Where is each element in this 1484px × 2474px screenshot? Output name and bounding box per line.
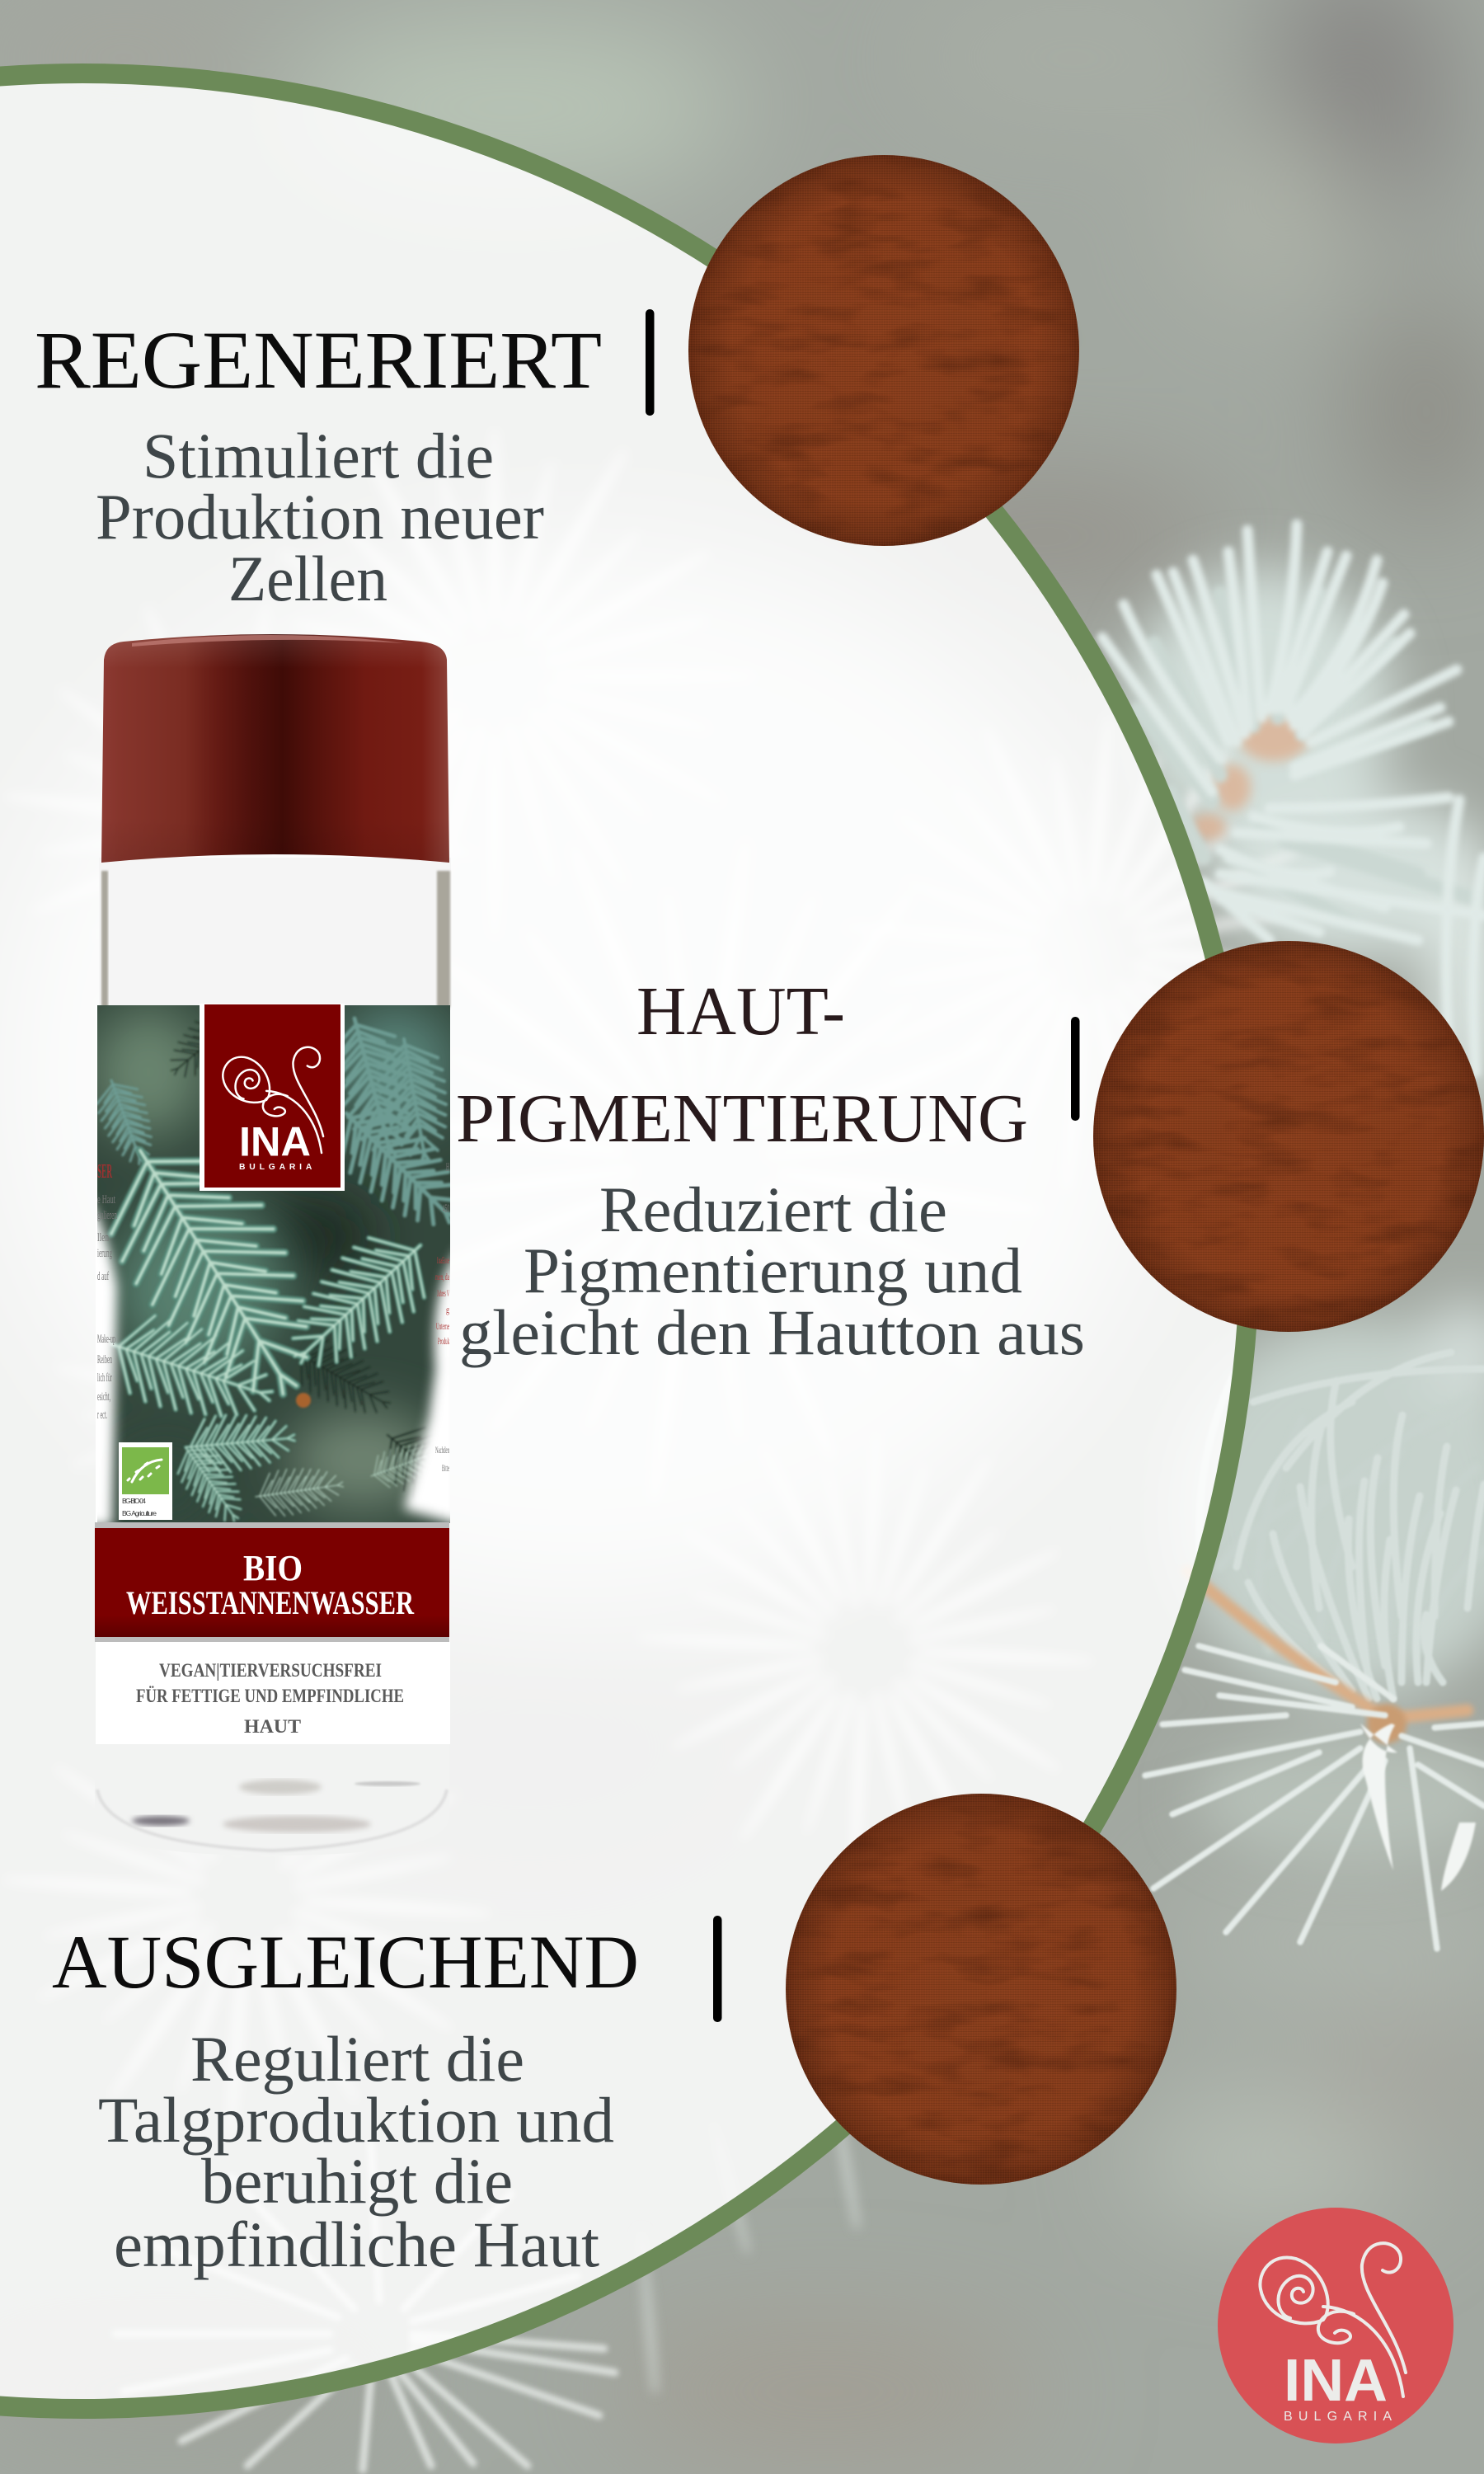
label red band with product name bbox=[95, 1522, 449, 1642]
fir branch: lower left bbox=[115, 2144, 615, 2470]
bottle base glass bbox=[95, 1740, 449, 1856]
small label side text bbox=[97, 1161, 449, 1474]
product bottle: Nachden bbox=[435, 1444, 449, 1456]
small label side text: Reiben bbox=[97, 1353, 112, 1366]
label fir photo bbox=[97, 1005, 450, 1523]
product bottle: men, da bbox=[435, 1271, 449, 1282]
product bottle: Produk bbox=[438, 1335, 449, 1347]
small label side text: gulieren bbox=[97, 1209, 117, 1222]
faint fir bursts behind the white disc bbox=[0, 428, 1352, 2158]
small label side text: Make-up bbox=[97, 1333, 115, 1346]
small label side text: r ect. bbox=[97, 1409, 107, 1422]
label red band with product name: BIO bbox=[243, 1548, 303, 1588]
fir branch: middle right bbox=[1145, 1352, 1484, 1949]
white vignette at label sides bbox=[82, 1192, 462, 1526]
panel: white disc with green ring bbox=[0, 73, 1250, 2409]
label claims: VEGAN|TIERVERSUCHSFREI bbox=[159, 1660, 382, 1681]
product bottle bbox=[77, 634, 503, 1856]
label logo square: BULGARIA bbox=[239, 1163, 312, 1172]
description: Stimuliert die bbox=[143, 420, 494, 492]
small label side text: ierung bbox=[97, 1247, 112, 1260]
divider bar bbox=[1071, 1017, 1080, 1121]
description bbox=[459, 1174, 1085, 1368]
product bottle: Unterne bbox=[436, 1320, 449, 1332]
bottle cap bbox=[101, 634, 449, 863]
product bottle: H bbox=[446, 1161, 449, 1174]
heading: haut-pigmentierung: PIGMENTIERUNG bbox=[456, 1080, 1028, 1157]
brown circle: pigmentierung bbox=[1093, 941, 1484, 1332]
brand logo: red circle bbox=[1218, 2208, 1453, 2443]
product bottle: InaEsse bbox=[437, 1254, 449, 1266]
fir branch: upper right bbox=[1102, 524, 1484, 1072]
heading: haut-pigmentierung: HAUT- bbox=[636, 973, 845, 1050]
label paper bbox=[96, 1005, 450, 1744]
heading: regeneriert: REGENERIERT bbox=[35, 314, 602, 406]
brown circle: regeneriert bbox=[688, 155, 1079, 546]
small label side text: esicht, bbox=[97, 1390, 110, 1404]
product bottle: Jahres V bbox=[437, 1287, 449, 1299]
small label side text: SER bbox=[97, 1161, 112, 1183]
description: beruhigt die bbox=[201, 2145, 513, 2217]
label claims: HAUT bbox=[244, 1716, 301, 1737]
organic leaf badge: BG-BIO-04 bbox=[122, 1497, 146, 1505]
bottle neck glass bbox=[99, 858, 451, 1010]
description: Reguliert die bbox=[190, 2023, 524, 2095]
divider bar bbox=[713, 1916, 722, 2022]
description bbox=[98, 2023, 614, 2280]
label red band with product name: WEISSTANNENWASSER bbox=[126, 1584, 415, 1621]
small label side text: llen bbox=[97, 1231, 109, 1244]
small label side text: d auf bbox=[97, 1270, 109, 1283]
brown circle: ausgleichend bbox=[786, 1794, 1176, 2185]
block: haut-pigmentierung bbox=[456, 973, 1085, 1368]
organic leaf badge bbox=[119, 1442, 172, 1520]
block: regeneriert bbox=[35, 309, 655, 614]
description: gleicht den Hautton aus bbox=[459, 1296, 1085, 1368]
label logo square: INA bbox=[239, 1119, 311, 1165]
small label side text: e Haut bbox=[97, 1193, 115, 1206]
description bbox=[96, 420, 544, 614]
description: Talgproduktion und bbox=[98, 2084, 614, 2156]
organic leaf badge: BG Agriculture bbox=[122, 1509, 157, 1517]
divider bar bbox=[646, 309, 655, 416]
heading: haut-pigmentierung bbox=[456, 973, 1028, 1157]
description: Zellen bbox=[228, 543, 387, 614]
brand logo: red circle: BULGARIA bbox=[1284, 2410, 1392, 2424]
label claims bbox=[136, 1660, 404, 1737]
brand logo: red circle: INA bbox=[1284, 2348, 1388, 2414]
block: ausgleichend bbox=[52, 1916, 722, 2280]
description: Produktion neuer bbox=[96, 481, 544, 553]
description: empfindliche Haut bbox=[114, 2208, 599, 2280]
description: Reduziert die bbox=[599, 1174, 947, 1245]
product bottle: 450 bbox=[443, 1202, 449, 1216]
description: Pigmentierung und bbox=[524, 1235, 1022, 1306]
small label side text: lich für bbox=[97, 1371, 112, 1385]
heading: ausgleichend: AUSGLEICHEND bbox=[52, 1920, 639, 2004]
label claims: FÜR FETTIGE UND EMPFINDLICHE bbox=[136, 1686, 404, 1706]
small label side text: g bbox=[446, 1304, 449, 1315]
label logo square bbox=[200, 1004, 345, 1191]
product bottle: Bitte bbox=[442, 1462, 449, 1474]
